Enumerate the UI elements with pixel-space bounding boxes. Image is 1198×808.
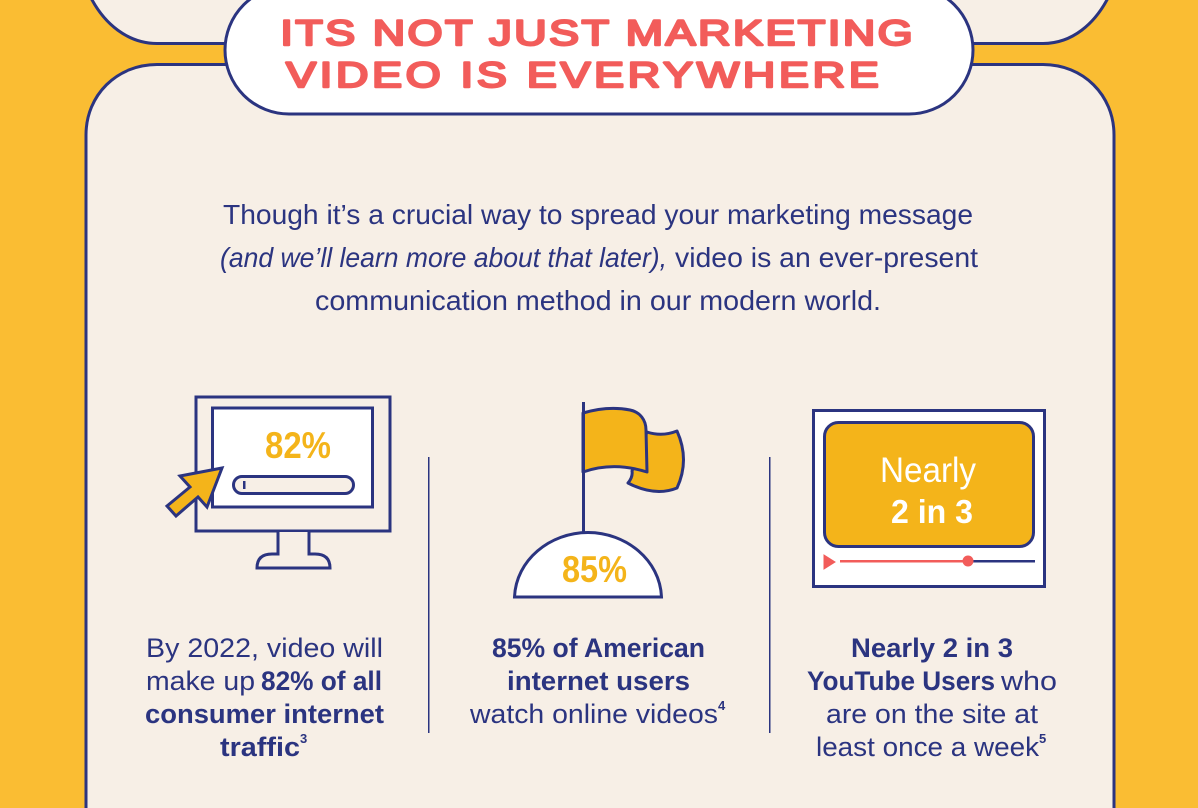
intro text: communication method in our modern world. — [315, 285, 881, 316]
caption: 82%: By 2022, video will — [146, 633, 383, 663]
title: ITS NOT JUST MARKETING — [280, 13, 913, 53]
panel: previous section bottom — [90, 0, 1109, 44]
icon: computer monitor with 82% — [167, 397, 390, 568]
title — [280, 13, 913, 95]
caption: 85%: watch online videos — [469, 699, 718, 729]
intro text: video is an ever-present — [675, 242, 978, 273]
icon: computer monitor with 82%: 82% — [265, 425, 331, 466]
divider right — [769, 457, 770, 733]
caption: 85%: internet users — [507, 666, 690, 696]
intro text: (and we’ll learn more about that later), — [220, 242, 667, 273]
caption: 82%: traffic — [220, 732, 300, 762]
caption: 82% — [145, 633, 384, 762]
icon: flag on hill with 85%: 85% — [562, 549, 627, 590]
caption: 2 in 3: Nearly 2 in 3 — [851, 633, 1013, 663]
caption: 82%: consumer internet — [145, 699, 384, 729]
caption: 2 in 3: least once a week — [816, 732, 1040, 762]
caption: 82%: 82% of all — [261, 666, 382, 696]
panel: main cream card — [86, 64, 1114, 808]
caption: 85%: 85% of American — [492, 633, 705, 663]
caption: 2 in 3: 5 — [1039, 731, 1046, 746]
title: VIDEO IS EVERYWHERE — [286, 55, 879, 95]
caption: 2 in 3: YouTube Users — [807, 666, 995, 696]
icon: video player: 2 in 3 — [891, 493, 973, 530]
heading pill — [225, 0, 973, 114]
divider left — [428, 457, 430, 733]
icon: video player — [814, 410, 1044, 586]
icon: video player: Nearly — [880, 451, 976, 490]
caption: 85%: 4 — [718, 698, 726, 713]
intro text: Though it’s a crucial way to spread your marketing message — [223, 199, 973, 230]
caption: 82%: 3 — [300, 731, 307, 746]
icon: flag on hill with 85% — [514, 402, 684, 597]
intro text — [220, 199, 978, 316]
caption: 82%: make up — [146, 666, 255, 696]
caption: 2 in 3 — [807, 633, 1057, 762]
caption: 2 in 3: are on the site at — [826, 699, 1039, 729]
caption: 2 in 3: who — [1000, 666, 1057, 696]
caption: 85% — [469, 633, 726, 729]
